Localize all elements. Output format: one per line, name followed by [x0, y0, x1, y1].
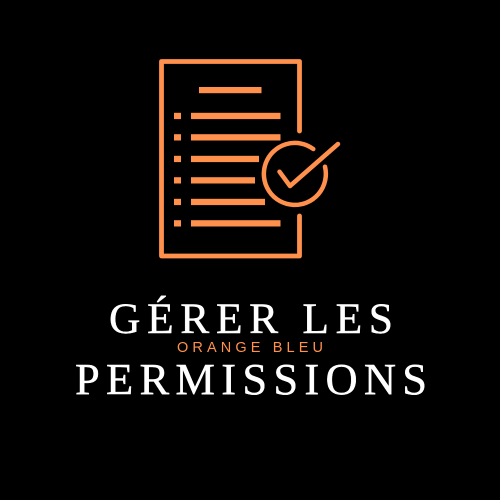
title: Permissions: PERMISSIONS — [75, 354, 427, 404]
title: Gérer les: GÉRER LES — [109, 294, 393, 343]
document title line — [199, 87, 262, 93]
checklist rows — [174, 113, 280, 226]
document outline — [162, 62, 300, 256]
icon: document with checklist — [162, 62, 338, 256]
icon: check mark in circle — [264, 143, 338, 205]
subtitle: Orange Bleu: ORANGE BLEU — [177, 340, 323, 356]
